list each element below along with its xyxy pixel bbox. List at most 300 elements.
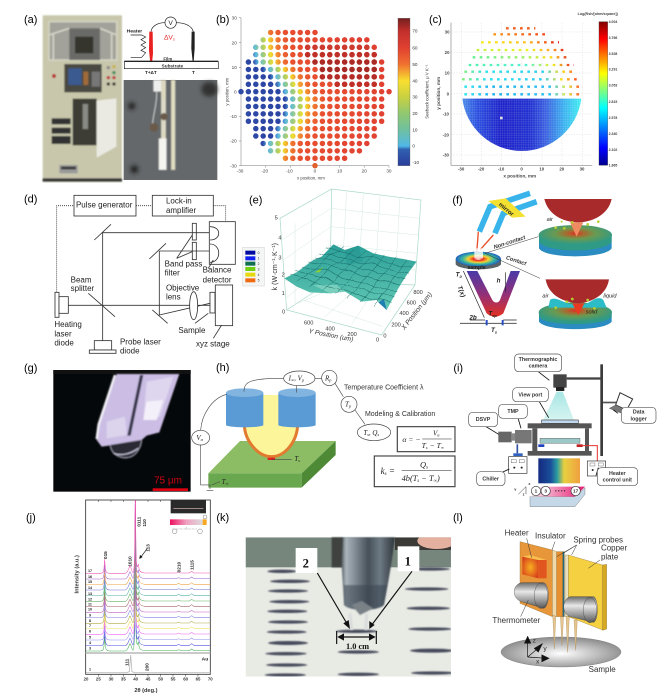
component labels: Balance xyxy=(203,266,232,275)
node bubbles: p xyxy=(348,404,352,409)
dot map xyxy=(241,32,389,166)
node bubbles: ∞ xyxy=(226,481,229,486)
label j: (j) xyxy=(26,512,36,524)
axes and grid: -20 xyxy=(478,167,485,172)
panel e: 3D thermal conductivity surface xyxy=(243,189,434,344)
probe and cylinders xyxy=(226,388,316,460)
probe V schematic: 2b xyxy=(468,314,477,321)
axes and grid: -30 xyxy=(443,153,450,158)
node bubbles: p xyxy=(328,377,332,382)
component labels: Probe laser xyxy=(120,337,161,346)
colorbar: 1.865 xyxy=(609,164,617,168)
schematic: heater, probes and film: ΔV xyxy=(164,34,173,41)
formula: alpha: α = − xyxy=(402,435,421,444)
contact detail: liquid xyxy=(603,294,617,300)
axes: -20 xyxy=(230,139,237,144)
axes: 20 xyxy=(362,168,367,173)
component labels: laser xyxy=(54,329,72,338)
callouts: Chiller xyxy=(482,476,499,482)
formula: k: − T xyxy=(419,474,435,483)
callout boxes and arrows xyxy=(296,546,419,651)
inset sample strip xyxy=(170,500,207,534)
component labels: amplifier xyxy=(166,206,196,215)
axis labels: 400 xyxy=(325,326,335,332)
schematic: heater, probes and film: Substrate xyxy=(162,63,184,68)
label d: (d) xyxy=(24,193,37,205)
callouts: TMP xyxy=(507,409,519,415)
sample numbers: 11 xyxy=(88,602,92,606)
sample numbers: 5 xyxy=(89,636,91,640)
chiller and heater units xyxy=(509,444,606,476)
peak labels: 015 xyxy=(103,551,108,559)
node bubbles: T xyxy=(222,478,226,486)
callouts: Thermographic xyxy=(519,357,557,363)
axis labels: 1 xyxy=(282,291,285,297)
axes and grid: -10 xyxy=(443,112,450,117)
component labels: splitter xyxy=(71,284,95,293)
peak labels xyxy=(103,516,195,671)
axis labels: 600 xyxy=(407,300,416,306)
x axis and y axis text: 25 xyxy=(96,677,101,682)
axes: x position, mm xyxy=(297,175,325,180)
sample plate with positions: • • • • xyxy=(555,489,566,494)
colorbar: 4.004 xyxy=(609,20,617,24)
axes: y position, mm xyxy=(224,77,229,106)
formula: k: ∞ xyxy=(434,479,438,484)
diffraction curves xyxy=(86,487,210,673)
photo: probe tips xyxy=(124,80,217,180)
mirror and beams xyxy=(477,193,537,253)
labels: Sample xyxy=(589,665,616,674)
callouts: logger xyxy=(631,417,647,423)
schematic: heater, probes and film: V xyxy=(168,20,173,27)
colorbar: 2.578 xyxy=(609,116,617,120)
formula: alpha: α xyxy=(437,433,440,438)
node bubbles: s xyxy=(377,432,379,437)
callouts: DSVP xyxy=(476,417,491,423)
label a: (a) xyxy=(24,14,37,26)
axes: 30 xyxy=(386,168,392,173)
node bubbles: s xyxy=(367,432,369,437)
3D box and grid xyxy=(280,189,421,335)
axes: -10 xyxy=(286,168,293,173)
legend xyxy=(243,247,264,286)
labels xyxy=(492,529,628,674)
callouts: control unit xyxy=(603,478,632,484)
schematic: heater, probes and film: Film xyxy=(163,56,172,61)
label b: (b) xyxy=(216,14,229,26)
non-contact detail xyxy=(539,199,612,256)
sample disc xyxy=(501,637,621,667)
green sample block xyxy=(208,441,336,488)
axis labels: 200 xyxy=(391,322,401,328)
panel g: microscope photo of probe tip xyxy=(24,362,191,492)
axes: 30 xyxy=(232,15,237,20)
sample plate with positions: x xyxy=(528,482,530,486)
peak labels: 113 xyxy=(146,544,151,552)
formula: k xyxy=(374,456,455,487)
sample plate with positions xyxy=(514,482,585,507)
axes: -30 xyxy=(230,163,237,168)
sample numbers: 13 xyxy=(88,592,92,596)
sample numbers: 6 xyxy=(89,630,91,634)
x axis and y axis text: 60 xyxy=(183,677,189,682)
x axis and y axis text xyxy=(75,555,213,694)
colorbar: 2.340 xyxy=(609,132,617,136)
scale bar xyxy=(153,476,188,491)
label g: (g) xyxy=(24,362,37,374)
component labels: diode xyxy=(54,339,74,348)
colorbar: 3.528 xyxy=(609,52,617,56)
label i: (i) xyxy=(453,363,463,375)
contact and non-contact arrows xyxy=(485,235,540,278)
panel d: optical setup schematic xyxy=(24,193,235,356)
sample plate with positions: 17 xyxy=(573,489,579,494)
colorbar: Log(Rsh/[ohm/square]) xyxy=(578,12,619,16)
photo background xyxy=(246,533,456,677)
annotations: Modeling & Calibration xyxy=(365,411,435,418)
axes: 10 xyxy=(232,65,237,70)
axis triad xyxy=(524,636,549,662)
schematic: heater, probes and film: T+ΔT xyxy=(145,70,157,75)
axes: 0 xyxy=(234,89,237,94)
colorbar: 60 xyxy=(412,45,418,50)
sample plate with positions: z xyxy=(523,493,525,497)
node bubbles: , V xyxy=(294,375,303,383)
panel b: Seebeck coefficient dot map xyxy=(216,14,429,180)
thermometers xyxy=(514,583,597,623)
probe xyxy=(332,537,395,630)
formula: k: Q xyxy=(420,460,426,469)
panel k: probe photo with scale xyxy=(216,512,456,677)
formula: alpha xyxy=(397,427,455,452)
labels: z xyxy=(533,638,536,645)
axes: 20 xyxy=(232,40,237,45)
component labels: Lock-in xyxy=(166,196,192,205)
node bubbles: R xyxy=(325,374,329,382)
formula: alpha: − T xyxy=(428,441,442,450)
node bubbles: T xyxy=(294,455,298,463)
formula: k: = xyxy=(387,466,395,476)
colorbar: 50 xyxy=(412,62,418,67)
node bubbles: s xyxy=(298,458,300,463)
sample numbers: 9 xyxy=(89,613,91,617)
formula: alpha: ∞ xyxy=(441,445,444,450)
schematic: heater, probes and film: s xyxy=(173,37,175,41)
axis labels: 0 xyxy=(383,333,386,339)
component labels: lens xyxy=(166,293,181,302)
formula: k: s xyxy=(426,465,428,470)
thermal image xyxy=(538,458,580,483)
axis labels: 4 xyxy=(278,236,281,242)
axis labels: 800 xyxy=(413,290,423,296)
laptop xyxy=(609,393,633,414)
contact and non-contact arrows: Non-contact xyxy=(493,235,527,251)
sample plate with positions: 3 xyxy=(544,489,547,494)
legend: 0 xyxy=(258,251,260,255)
axes and grid: -10 xyxy=(498,167,505,172)
colorbar: 20 xyxy=(412,111,418,116)
axis labels: 3 xyxy=(278,256,281,262)
labels: Copper xyxy=(601,543,628,552)
ruled marks xyxy=(265,567,454,677)
sample numbers: 8 xyxy=(89,619,91,623)
sample numbers xyxy=(88,569,208,672)
probe V schematic: sp xyxy=(492,313,497,318)
callout boxes and arrows: 1 xyxy=(405,555,411,569)
component labels xyxy=(54,196,232,356)
axis labels: 2 xyxy=(282,273,285,279)
sample numbers: 15 xyxy=(88,580,92,584)
sample numbers: 12 xyxy=(88,598,92,602)
colorbar: 10 xyxy=(412,127,418,132)
peak labels: 110 xyxy=(142,519,147,527)
x axis and y axis text: 30 xyxy=(109,677,114,682)
component labels: Beam xyxy=(71,275,92,284)
axes and grid: 30 xyxy=(445,30,450,35)
axes: 10 xyxy=(337,168,343,173)
axes and grid: 30 xyxy=(580,167,585,172)
callouts: Heater xyxy=(609,471,626,477)
panel f: probe on sample contact and non-contact xyxy=(452,193,617,334)
callout boxes and arrows: 2 xyxy=(303,556,309,570)
component labels: Pulse generator xyxy=(76,200,133,209)
non-contact detail: air xyxy=(547,217,554,223)
contact detail: solid xyxy=(586,310,598,316)
sample numbers: 10 xyxy=(88,608,92,612)
plot frame xyxy=(86,500,210,677)
x axis and y axis text: 65 xyxy=(196,677,201,682)
axis labels: 5 xyxy=(275,215,278,221)
x axis and y axis text: 45 xyxy=(146,677,151,682)
x axis and y axis text: 70 xyxy=(208,677,213,682)
axes and grid: 20 xyxy=(559,167,565,172)
colorbar: 2.102 xyxy=(609,148,617,152)
axes and grid: 0 xyxy=(520,167,523,172)
camera, cone and pole xyxy=(543,364,616,456)
contact detail xyxy=(539,279,617,329)
axes and grid: 10 xyxy=(445,71,450,76)
copper plate and insulator stack xyxy=(520,542,607,630)
peak labels: 1010 xyxy=(128,556,133,567)
heater block xyxy=(522,555,547,578)
labels: Spring probes xyxy=(573,536,623,545)
label l: (l) xyxy=(453,512,463,524)
probe V schematic: h xyxy=(497,277,501,284)
label h: (h) xyxy=(216,362,229,374)
labels: x xyxy=(536,659,540,666)
photo: measurement cabinet xyxy=(43,15,122,182)
formula: k: s xyxy=(385,472,387,477)
surface plot xyxy=(284,244,417,310)
panel h: scanning probe circuit xyxy=(192,362,455,490)
vacuum chamber xyxy=(498,420,592,456)
panel l: dual probe head on sample xyxy=(453,512,628,674)
optical layout xyxy=(55,195,235,353)
probe V schematic: T xyxy=(491,327,495,334)
probe V schematic: T(x) xyxy=(456,285,466,298)
circuit wires xyxy=(201,378,365,490)
component labels: filter xyxy=(165,269,180,278)
probe V schematic: s xyxy=(495,329,498,334)
callouts xyxy=(469,354,656,486)
x axis and y axis text: 55 xyxy=(171,677,176,682)
colorbar: 3.053 xyxy=(609,84,617,88)
sample numbers: 7 xyxy=(89,624,91,628)
labels: Thermometer xyxy=(492,616,541,625)
label e: (e) xyxy=(249,194,262,206)
contact and non-contact arrows: Contact xyxy=(505,255,528,268)
component labels: Band pass xyxy=(165,259,202,268)
component labels: Sample xyxy=(178,326,206,335)
node bubbles: α xyxy=(201,437,204,442)
panel a: instrument cabinet and probe schematic xyxy=(24,14,218,182)
axes xyxy=(224,15,392,180)
node bubbles: , Q xyxy=(369,429,377,437)
peak labels: 200 xyxy=(144,663,149,671)
formula: k: ) xyxy=(436,474,440,483)
sample disc xyxy=(456,248,501,271)
sample disc: sample xyxy=(467,265,486,271)
probe V schematic: T xyxy=(456,272,460,279)
labels: plate xyxy=(601,553,619,562)
scale bar: 75 µm xyxy=(154,476,182,487)
probe V schematic: T xyxy=(488,311,492,318)
legend: 2 xyxy=(258,262,260,266)
peak labels: 0111 xyxy=(136,516,141,527)
axis labels: 600 xyxy=(304,321,313,327)
colorbar xyxy=(578,12,619,168)
colorbar: 30 xyxy=(412,95,418,100)
component labels: detector xyxy=(203,275,232,284)
node bubbles: ∞ xyxy=(291,378,294,383)
colorbar xyxy=(398,18,429,166)
mirror and beams: mirror xyxy=(497,202,515,218)
sample numbers: 14 xyxy=(88,586,93,590)
colorbar: 70 xyxy=(412,29,418,34)
labels: y xyxy=(543,645,547,652)
colorbar: 0 xyxy=(412,144,415,149)
sample numbers: Au xyxy=(202,656,208,662)
component labels: Heating xyxy=(54,320,82,329)
peak labels: 1115 xyxy=(190,560,195,570)
formula: k: 4b(T xyxy=(402,474,417,483)
panel j: XRD patterns xyxy=(26,487,213,694)
axis labels: X Position (μm) xyxy=(400,291,434,332)
axes and grid: 20 xyxy=(445,50,450,55)
colorbar: 2.815 xyxy=(609,100,617,104)
node bubbles: p xyxy=(301,378,305,383)
axis labels: 0 xyxy=(376,338,379,344)
peak labels: 111 xyxy=(124,658,129,666)
probe V schematic: 0 xyxy=(460,274,463,279)
x axis and y axis text: 40 xyxy=(133,677,139,682)
axis labels: k (W·cm⁻¹·K⁻¹) xyxy=(272,243,279,290)
labels: Insulator xyxy=(535,531,566,540)
schematic: heater, probes and film: T xyxy=(192,70,195,75)
component labels: diode xyxy=(120,347,140,356)
sample numbers: 3 xyxy=(89,647,91,651)
callouts: camera xyxy=(529,364,547,370)
legend: 5 xyxy=(258,279,260,283)
axes and grid: -30 xyxy=(458,167,465,172)
schematic: heater, probes and film xyxy=(124,17,218,75)
axes: -10 xyxy=(230,114,237,119)
axis labels: 200 xyxy=(347,332,357,338)
axis labels: Y Position (um) xyxy=(308,328,354,344)
node bubbles xyxy=(192,370,391,486)
x axis and y axis text: 50 xyxy=(158,677,164,682)
axes and grid: y position, mm xyxy=(436,77,441,110)
axes and grid: -20 xyxy=(443,132,450,137)
colorbar: 3.291 xyxy=(609,68,617,72)
x axis and y axis text: 20 xyxy=(84,677,89,682)
formula: k: k xyxy=(381,466,385,476)
node bubbles: T xyxy=(345,401,349,409)
labels: Heater xyxy=(505,529,529,538)
component labels: xyz stage xyxy=(196,339,230,348)
axis labels: 0 xyxy=(282,309,285,315)
colorbar: Seebeck coefficient, μ V K⁻¹ xyxy=(424,64,429,119)
sample numbers: 16 xyxy=(88,575,92,579)
node bubbles: T xyxy=(363,429,367,437)
axis labels: 400 xyxy=(399,311,409,317)
annotations xyxy=(344,384,435,418)
legend: 3 xyxy=(258,267,260,271)
colorbar: 3.766 xyxy=(609,36,617,40)
formula: k: s xyxy=(417,479,419,484)
label f: (f) xyxy=(452,195,463,207)
axes and grid: 0 xyxy=(447,91,450,96)
measured points, upper half xyxy=(462,28,581,94)
axes: -30 xyxy=(237,168,244,173)
spring probes xyxy=(553,613,577,652)
axes and grid xyxy=(436,23,592,178)
sample plate with positions: 1 xyxy=(535,489,538,494)
axis labels xyxy=(272,215,434,344)
x axis and y axis text: Intensity (a.u.) xyxy=(75,555,81,593)
x axis and y axis text: 2θ (deg.) xyxy=(134,688,158,694)
legend: 4 xyxy=(258,273,260,277)
schematic: heater, probes and film: Heater xyxy=(127,28,142,34)
heat map, lower half xyxy=(462,99,581,151)
axes and grid: 10 xyxy=(539,167,545,172)
label c: (c) xyxy=(429,14,442,26)
peak labels: 0210 xyxy=(176,562,181,572)
sample plate with positions: Y xyxy=(514,488,517,492)
contact detail: air xyxy=(542,294,550,300)
callout boxes and arrows: 1.0 cm xyxy=(346,642,369,651)
colorbar: 40 xyxy=(412,79,418,84)
sample numbers: 4 xyxy=(89,641,92,645)
probe V schematic xyxy=(456,271,520,334)
x axis and y axis text: 35 xyxy=(121,677,126,682)
formula: alpha: V xyxy=(433,430,437,438)
node bubbles: V xyxy=(196,434,201,442)
node bubbles: I xyxy=(289,375,291,383)
photo xyxy=(53,370,191,492)
label k: (k) xyxy=(216,512,229,524)
sample numbers: 17 xyxy=(88,569,92,573)
component labels: Objective xyxy=(166,283,200,292)
formula: alpha: T xyxy=(422,441,426,450)
callouts: Data xyxy=(633,410,644,416)
callouts: View port xyxy=(518,392,542,398)
formula: alpha: s xyxy=(426,445,428,450)
annotations: Temperature Coefficient λ xyxy=(344,384,424,391)
legend: 1 xyxy=(258,257,260,261)
colorbar: -10 xyxy=(412,160,419,165)
